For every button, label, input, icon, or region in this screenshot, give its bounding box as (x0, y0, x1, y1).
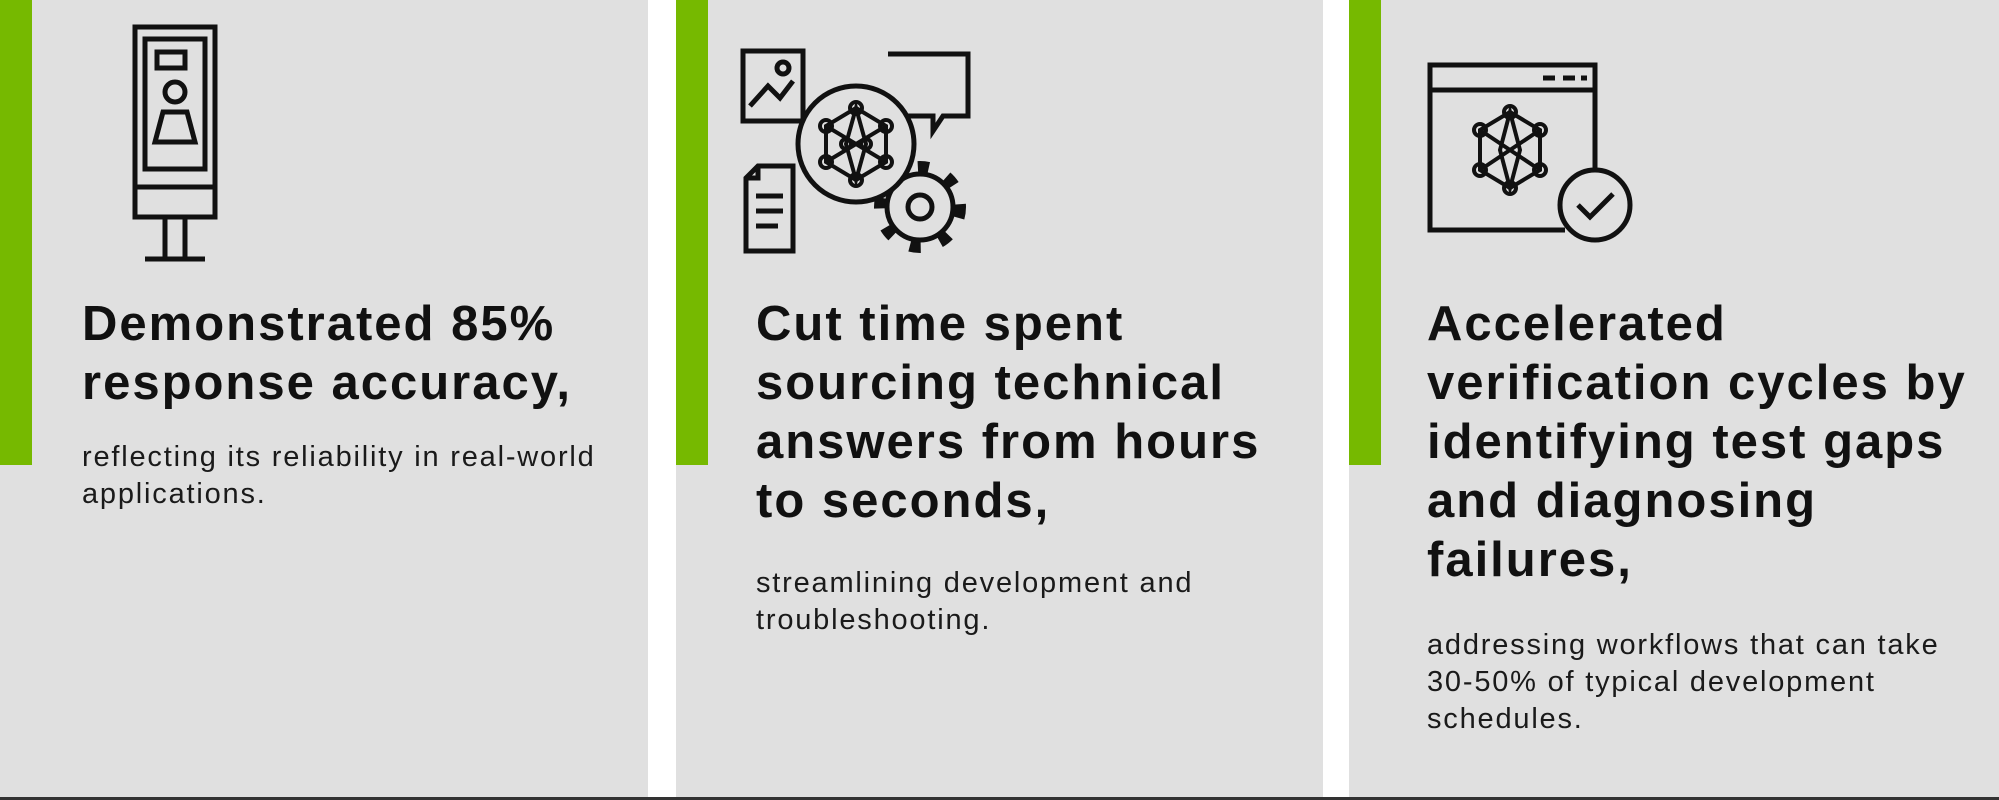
headline: Cut time spent (756, 297, 1124, 351)
headline: Accelerated (1427, 297, 1727, 351)
body text: streamlining development and (756, 567, 1193, 599)
panel: time (676, 0, 1323, 797)
panel: verification (1349, 0, 1999, 797)
body text: 30-50% of typical development (1427, 666, 1876, 698)
body text (1427, 629, 1940, 735)
panel: accuracy (0, 0, 648, 797)
headline (756, 297, 1260, 528)
body text: troubleshooting. (756, 604, 991, 636)
icon: kiosk (132, 24, 218, 262)
body text (82, 441, 596, 510)
accent bar (0, 0, 32, 465)
body text: reflecting its reliability in real-world (82, 441, 596, 473)
headline: answers from hours (756, 415, 1260, 469)
headline: failures, (1427, 533, 1633, 587)
headline: sourcing technical (756, 356, 1225, 410)
headline (82, 297, 572, 410)
headline: identifying test gaps (1427, 415, 1945, 469)
accent bar (1349, 0, 1381, 465)
bottom rule (0, 797, 1999, 800)
headline: response accuracy, (82, 356, 572, 410)
gear (880, 167, 960, 247)
icon: AI hub (740, 48, 970, 254)
icon: browser with check (1428, 62, 1632, 242)
body text: schedules. (1427, 703, 1584, 735)
body text: addressing workflows that can take (1427, 629, 1940, 661)
headline (1427, 297, 1967, 587)
headline: to seconds, (756, 474, 1050, 528)
headline: verification cycles by (1427, 356, 1967, 410)
accent bar (676, 0, 708, 465)
body text: applications. (82, 478, 267, 510)
headline: Demonstrated 85% (82, 297, 555, 351)
body text (756, 567, 1193, 636)
headline: and diagnosing (1427, 474, 1817, 528)
